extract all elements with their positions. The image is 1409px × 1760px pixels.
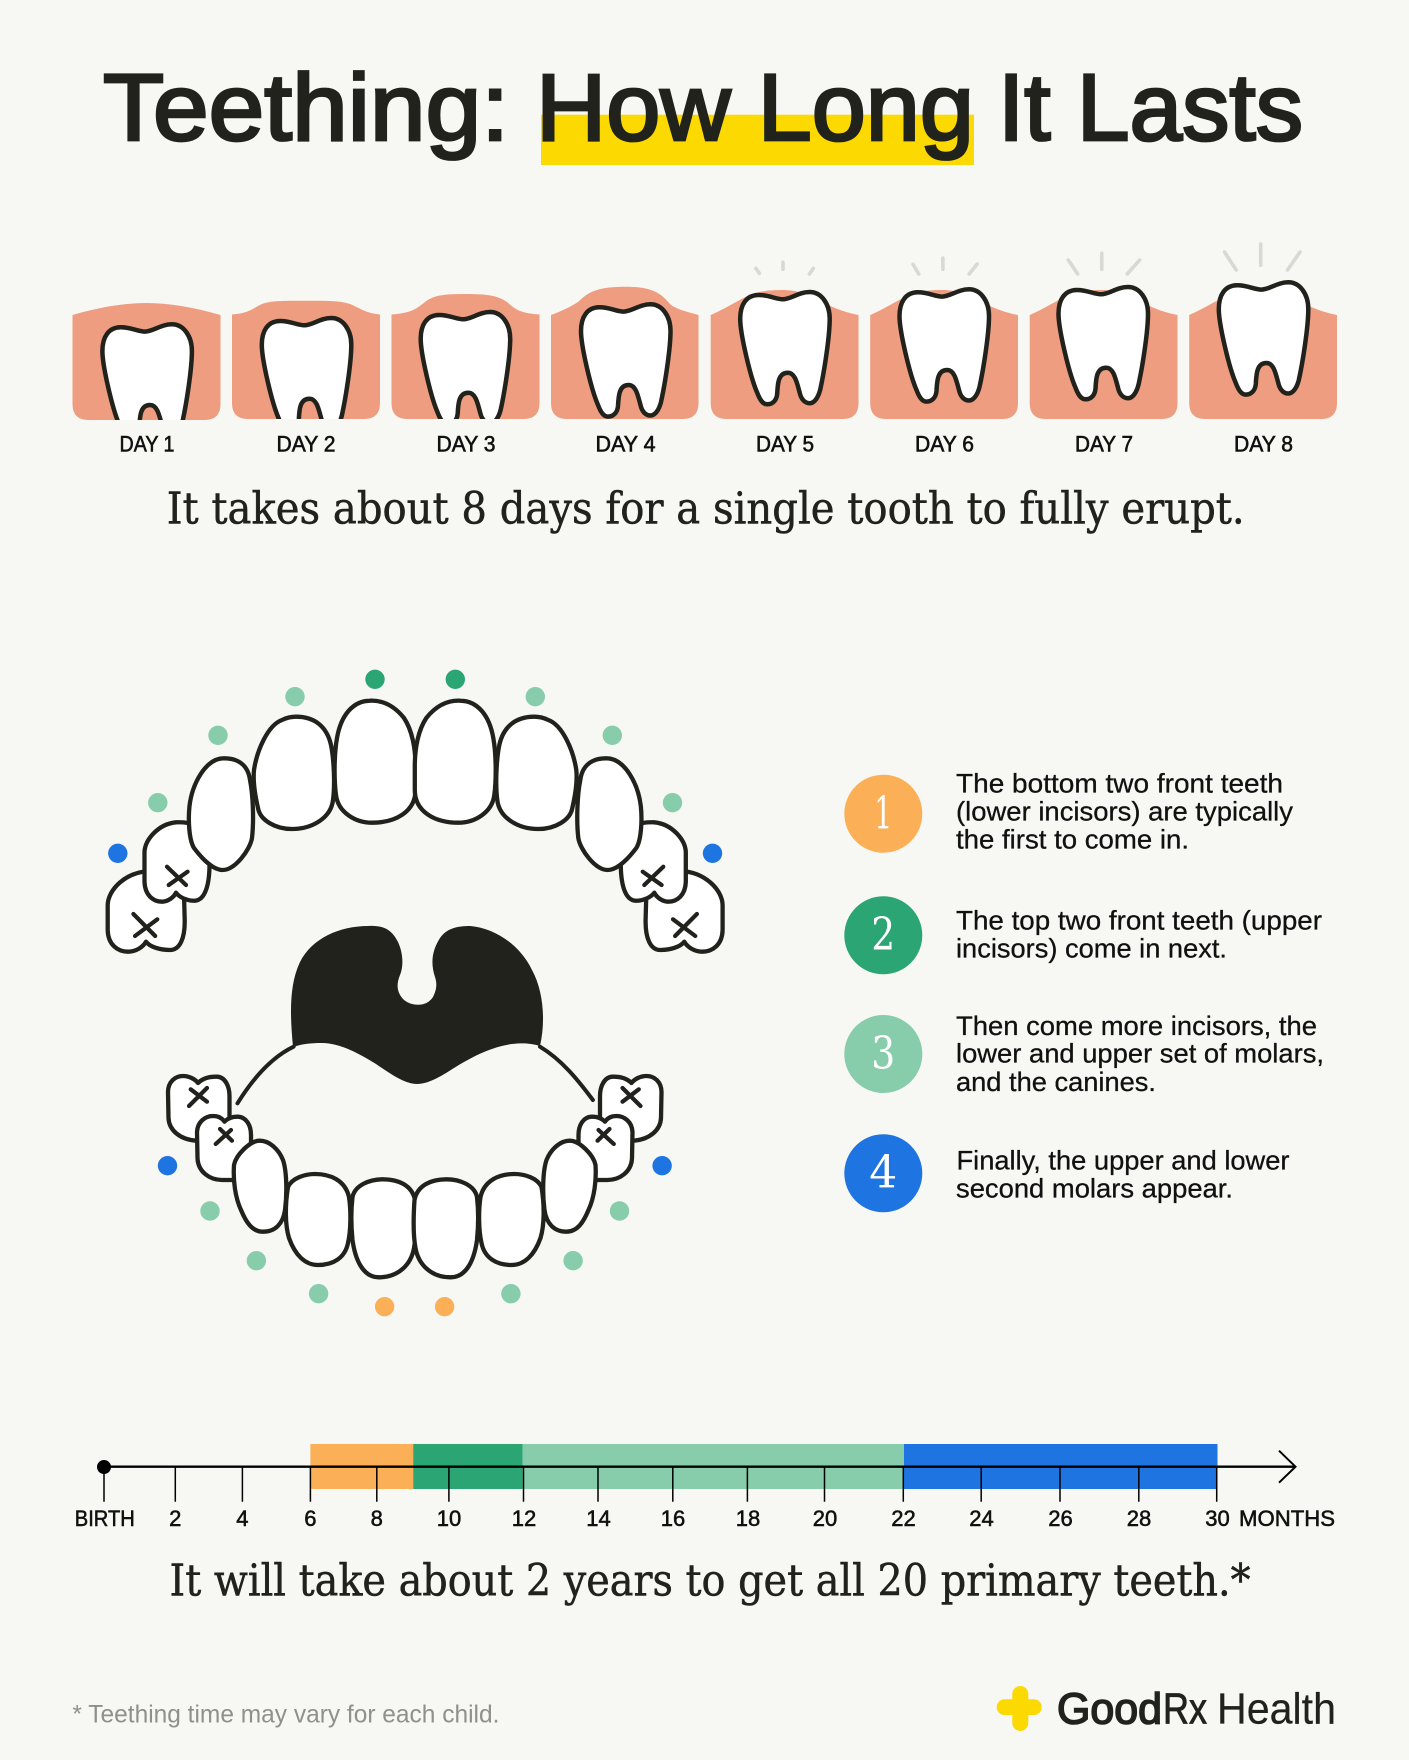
panel: eruption over eight days: [72, 244, 1337, 457]
legend item 2: 2: [871, 907, 895, 960]
timeline labels: 24: [969, 1506, 994, 1531]
timeline labels: 20: [813, 1506, 837, 1531]
title text: It Lasts: [998, 55, 1303, 161]
legend item 3: [844, 1011, 1324, 1097]
footnote: * Teething time may vary for each child.: [72, 1701, 499, 1729]
day 4 tooth: [551, 287, 698, 457]
panel: timeline: [75, 1444, 1335, 1531]
palate and throat: [291, 926, 543, 1084]
legend item 4: [844, 1134, 1290, 1212]
timeline labels: BIRTH: [75, 1506, 135, 1531]
day 8 tooth: [1189, 244, 1337, 457]
timeline labels: 26: [1048, 1506, 1073, 1531]
day 3 tooth: DAY 3: [436, 432, 496, 457]
timeline labels: 4: [236, 1506, 249, 1531]
upper order dots: [108, 670, 722, 863]
timeline caption: It will take about 2 years to get all 20 primary teeth.*: [170, 1556, 1250, 1606]
day 6 tooth: DAY 6: [915, 432, 974, 457]
timeline colored bars: [310, 1444, 1217, 1489]
day 2 tooth: DAY 2: [276, 432, 336, 457]
legend item 1: The bottom two front teeth: [956, 769, 1283, 799]
day 8 tooth: DAY 8: [1234, 432, 1293, 457]
panel: mouth diagram: [108, 670, 723, 1316]
day 6 tooth: [870, 258, 1018, 457]
legend item 1: (lower incisors) are typically: [956, 797, 1293, 827]
legend item 1: [844, 769, 1293, 854]
logo wordmark: Good: [1057, 1684, 1162, 1733]
legend item 3: lower and upper set of molars,: [956, 1039, 1324, 1069]
legend item 2: incisors) come in next.: [956, 933, 1227, 963]
timeline labels: 2: [169, 1506, 181, 1531]
logo cross icon: [997, 1686, 1042, 1731]
legend item 3: Then come more incisors, the: [956, 1011, 1317, 1041]
day 7 tooth: DAY 7: [1075, 432, 1133, 457]
title: [103, 55, 1303, 165]
lower order dots: [158, 1156, 672, 1316]
legend item 4: second molars appear.: [956, 1173, 1233, 1203]
logo wordmark: Health: [1217, 1684, 1336, 1733]
timeline labels: 28: [1127, 1506, 1151, 1531]
day 7 tooth: [1030, 253, 1178, 457]
timeline labels: [75, 1506, 1335, 1531]
legend item 2: The top two front teeth (upper: [956, 905, 1322, 935]
day 1 tooth: DAY 1: [120, 432, 174, 457]
lower teeth: [168, 1076, 662, 1277]
timeline labels: 8: [371, 1506, 383, 1531]
timeline labels: 12: [512, 1506, 536, 1531]
legend item 1: 1: [874, 786, 892, 839]
logo wordmark: Rx: [1163, 1684, 1207, 1733]
title highlight: [541, 115, 974, 165]
timeline axis with ticks: [97, 1451, 1296, 1502]
timeline labels: 30: [1205, 1506, 1230, 1531]
legend item 2: [844, 896, 1322, 974]
legend item 4: 4: [869, 1146, 897, 1199]
timeline labels: MONTHS: [1239, 1506, 1335, 1531]
day 3 tooth: [392, 294, 540, 457]
timeline labels: 22: [891, 1506, 916, 1531]
eruption caption: It takes about 8 days for a single tooth to fully erupt.: [167, 484, 1245, 534]
day 5 tooth: [711, 262, 858, 457]
title text: Teething:: [103, 55, 509, 161]
upper teeth: [108, 701, 723, 952]
day 2 tooth: [232, 301, 380, 457]
timeline labels: 10: [437, 1506, 461, 1531]
timeline labels: 14: [586, 1506, 611, 1531]
legend item 1: the first to come in.: [956, 824, 1189, 854]
panel: legend: [844, 769, 1324, 1212]
legend item 3: 3: [871, 1026, 895, 1079]
day 5 tooth: DAY 5: [756, 432, 814, 457]
timeline labels: 6: [304, 1506, 317, 1531]
timeline labels: 18: [736, 1506, 760, 1531]
timeline labels: 16: [661, 1506, 685, 1531]
day 4 tooth: DAY 4: [596, 432, 656, 457]
logo: [997, 1684, 1336, 1733]
day 1 tooth: [72, 303, 220, 457]
legend item 3: and the canines.: [956, 1067, 1156, 1097]
tongue outline: [238, 1047, 593, 1103]
legend item 4: Finally, the upper and lower: [956, 1145, 1290, 1175]
title text: How Long: [536, 55, 974, 161]
